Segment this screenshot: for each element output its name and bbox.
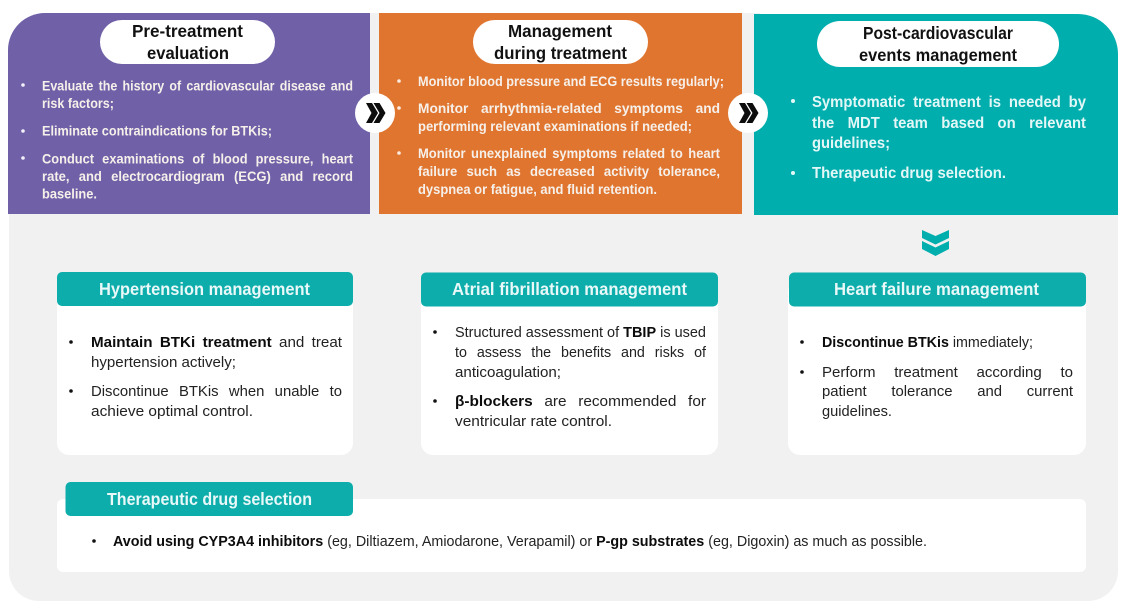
panel: hypertension management — [57, 272, 353, 455]
panel: atrial fibrillation management — [421, 272, 718, 455]
text block: post-event list: Therapeutic drug selection. — [812, 165, 1006, 182]
panel: management during treatment — [379, 13, 742, 214]
heading: pre-treatment evaluation: evaluation — [147, 43, 229, 63]
arrow: down chevrons — [922, 230, 949, 256]
text block: heart failure list: guidelines. — [822, 404, 892, 420]
text block: during-treatment list: Monitor unexplained symptoms related to heart — [418, 145, 720, 161]
text block: pre-treatment list: rate, and electrocardiogram (ECG) and record — [42, 168, 353, 184]
heading: therapeutic drug selection — [66, 482, 353, 516]
text block: pre-treatment list — [21, 78, 353, 202]
text block: atrial fibrillation list: β-blockers are recommended for — [455, 394, 706, 410]
text block: pre-treatment list: Conduct examinations of blood pressure, heart — [42, 150, 353, 166]
text block: during-treatment list: dyspnea or fatigue, and fluid retention. — [418, 181, 657, 197]
text block: post-event list — [791, 94, 1087, 182]
text block: during-treatment list: Monitor blood pressure and ECG results regularly; — [418, 73, 724, 89]
text block: atrial fibrillation list — [433, 325, 707, 430]
text block: post-event list: guidelines; — [812, 135, 890, 152]
arrow: orange to teal — [728, 93, 768, 133]
heading: hypertension management — [57, 272, 353, 306]
heading: hypertension management: Hypertension management — [99, 279, 310, 299]
text block: atrial fibrillation list: Structured assessment of TBIP is used — [455, 325, 706, 341]
panel: pre-treatment evaluation — [8, 13, 370, 214]
text block: drug selection note: Avoid using CYP3A4 inhibitors (eg, Diltiazem, Amiodarone, Verapamil) or P-gp substrates (eg, Digoxin) as much as possible. — [113, 534, 927, 550]
heading: therapeutic drug selection: Therapeutic drug selection — [107, 489, 312, 509]
text block: hypertension list — [69, 335, 342, 420]
heading: management during treatment: Management — [508, 21, 612, 41]
heading: atrial fibrillation management — [421, 272, 718, 306]
text block: pre-treatment list: Eliminate contraindications for BTKis; — [42, 123, 272, 139]
text block: heart failure list: Perform treatment according to — [822, 365, 1073, 381]
text block: pre-treatment list: baseline. — [42, 186, 97, 202]
text block: heart failure list — [800, 335, 1073, 420]
text block: hypertension list: achieve optimal control. — [91, 404, 253, 420]
heading: pre-treatment evaluation: Pre-treatment — [132, 21, 243, 41]
text block: pre-treatment list: Evaluate the history of cardiovascular disease and — [42, 78, 353, 94]
text block: atrial fibrillation list: anticoagulation; — [455, 365, 561, 381]
text block: during-treatment list: performing relevant examinations if needed; — [418, 118, 692, 134]
heading: pre-treatment evaluation — [100, 20, 275, 64]
heading: post-cardiovascular events management — [817, 21, 1059, 67]
text block: during-treatment list: Monitor arrhythmia-related symptoms and — [418, 100, 720, 116]
text block: pre-treatment list: risk factors; — [42, 95, 114, 111]
text block: heart failure list: patient tolerance and current — [822, 384, 1073, 400]
heading: management during treatment: during treatment — [494, 43, 627, 63]
text block: post-event list: Symptomatic treatment is needed by — [812, 94, 1086, 111]
heading: heart failure management: Heart failure management — [834, 279, 1039, 299]
text block: during-treatment list: failure such as decreased activity tolerance, — [418, 163, 720, 179]
text block: atrial fibrillation list: to assess the benefits and risks of — [455, 345, 707, 361]
panel: therapeutic drug selection — [57, 482, 1086, 572]
heading: management during treatment — [473, 20, 648, 64]
text block: atrial fibrillation list: ventricular rate control. — [455, 414, 612, 430]
text block: hypertension list: Maintain BTKi treatment and treat — [91, 335, 342, 351]
text block: heart failure list: Discontinue BTKis immediately; — [822, 335, 1033, 351]
heading: post-cardiovascular events management: events management — [859, 45, 1017, 65]
panel: heart failure management — [788, 272, 1086, 455]
panel: post-cardiovascular events management — [754, 14, 1118, 215]
heading: heart failure management — [789, 272, 1086, 306]
text block: during-treatment list — [397, 73, 724, 197]
text block: post-event list: the MDT team based on relevant — [812, 115, 1087, 132]
arrow: purple to orange — [355, 93, 395, 133]
heading: atrial fibrillation management: Atrial fibrillation management — [452, 279, 687, 299]
text block: hypertension list: Discontinue BTKis when unable to — [91, 384, 342, 400]
text block: hypertension list: hypertension actively; — [91, 355, 236, 371]
heading: post-cardiovascular events management: Post-cardiovascular — [863, 23, 1013, 43]
